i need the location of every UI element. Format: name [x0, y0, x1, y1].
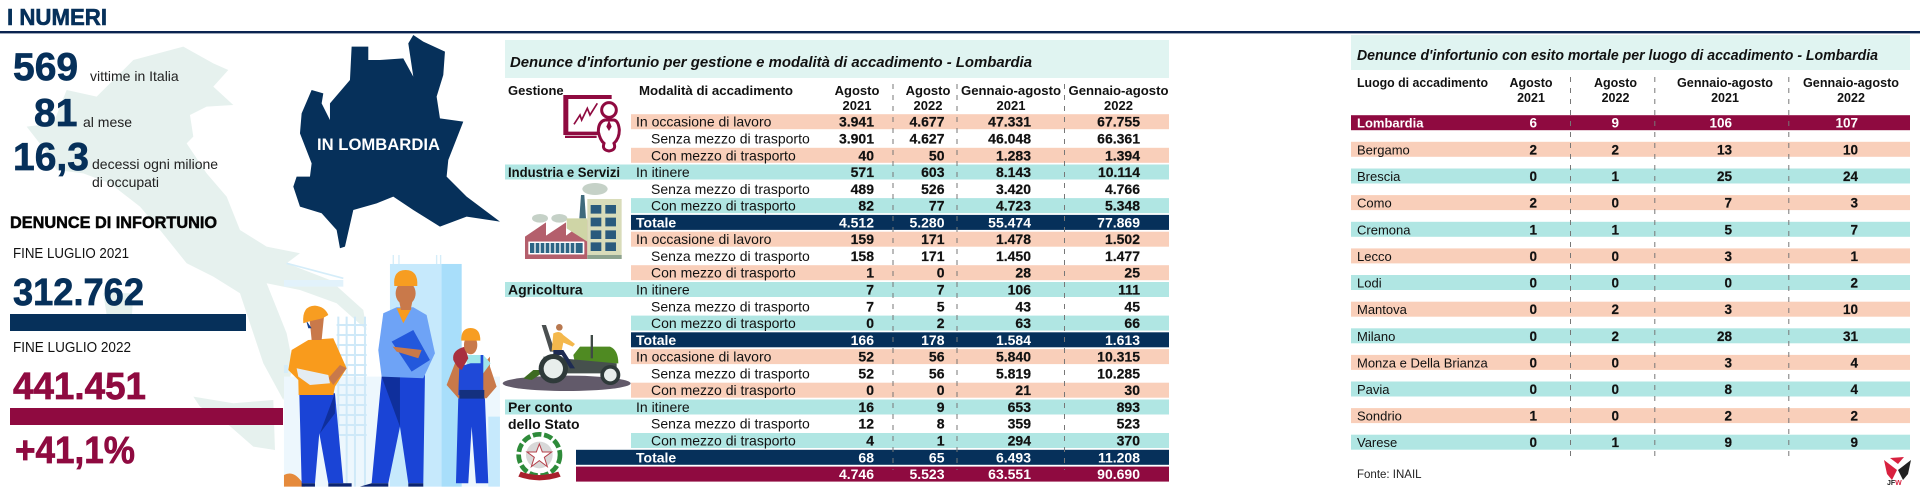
- row: in occasione di lavoro: [636, 231, 1140, 247]
- stat: fine luglio 2021: FINE LUGLIO 2021: [13, 246, 129, 262]
- row: senza mezzo: Senza mezzo di trasporto: [651, 298, 810, 314]
- row: totale industria: Totale: [636, 214, 676, 230]
- row: totale industria: 55.474: [988, 214, 1031, 230]
- icon: manager with chart: [563, 95, 619, 151]
- row: Brescia: 25: [1717, 169, 1732, 184]
- row: senza mezzo: 359: [1008, 416, 1031, 432]
- stat: 16,3 decessi: [13, 136, 218, 190]
- label: Per conto dello Stato: Per conto: [508, 399, 573, 415]
- row: Sondrio: 1: [1529, 409, 1537, 424]
- row: totale stato: Totale: [636, 449, 676, 465]
- row: con mezzo: Con mezzo di trasporto: [651, 432, 796, 448]
- row: Varese: Varese: [1357, 435, 1397, 450]
- icon: Italian Republic emblem: [518, 434, 561, 480]
- row: con mezzo: [651, 265, 1140, 281]
- row: grand total: 63.551: [988, 466, 1031, 482]
- row: con mezzo: 77: [929, 198, 945, 214]
- table header: Gennaio-agosto: [961, 83, 1061, 98]
- row: senza mezzo: 3.901: [839, 130, 874, 146]
- row: totale agricoltura: [636, 332, 1140, 348]
- table header: 2021: [843, 98, 871, 113]
- panel: table fatal accidents by place: [1351, 35, 1911, 487]
- source note: Fonte: INAIL: [1357, 469, 1422, 481]
- row: in occasione di lavoro: 52: [858, 349, 874, 365]
- table header: 2021: [997, 98, 1025, 113]
- row: Cremona: 7: [1850, 222, 1858, 237]
- row: con mezzo: 25: [1124, 265, 1140, 281]
- row: Sondrio: 0: [1611, 409, 1619, 424]
- panel: table by management: [503, 40, 1169, 482]
- row: Pavia: 4: [1850, 382, 1858, 397]
- table header: Agosto: [906, 83, 950, 98]
- row: senza mezzo: [651, 416, 1140, 432]
- row: senza mezzo: 5: [937, 298, 945, 314]
- row: con mezzo: 1: [866, 265, 874, 281]
- row: senza mezzo: 4.766: [1105, 181, 1140, 197]
- row: con mezzo: Con mezzo di trasporto: [651, 147, 796, 163]
- row: Monza e Della Brianza: 0: [1611, 355, 1619, 370]
- row: Varese: 1: [1611, 435, 1619, 450]
- stat: 569 vittime in Italia: vittime in Italia: [90, 68, 179, 84]
- worker: center: [360, 270, 435, 487]
- stat: 569 vittime in Italia: [13, 46, 179, 89]
- row: Varese: [1351, 435, 1910, 450]
- row: totale stato: 68: [858, 449, 874, 465]
- row: in occasione di lavoro: 1.478: [996, 231, 1031, 247]
- row: con mezzo: Con mezzo di trasporto: [651, 198, 796, 214]
- row: Brescia: Brescia: [1357, 169, 1401, 184]
- row: Milano: 28: [1717, 329, 1732, 344]
- label: Per conto dello Stato: dello Stato: [508, 416, 580, 432]
- row: Varese: 9: [1850, 435, 1858, 450]
- row: grand total: 5.523: [909, 466, 945, 482]
- row: Milano: 31: [1843, 329, 1858, 344]
- row: in itinere: [636, 399, 1140, 415]
- table title: Denunce d'infortunio per gestione e modalità di accadimento - Lombardia: [510, 55, 1032, 71]
- stat: 16,3 decessi: decessi ogni milione: [92, 156, 218, 172]
- row: Brescia: 0: [1529, 169, 1537, 184]
- row: con mezzo: 1.394: [1105, 147, 1140, 163]
- table title: Denunce d'infortunio con esito mortale per luogo di accadimento - Lombardia: [1357, 48, 1878, 64]
- row: totale industria: 77.869: [1097, 214, 1140, 230]
- row: in occasione di lavoro: In occasione di lavoro: [636, 231, 772, 247]
- row: totale agricoltura: 178: [921, 332, 945, 348]
- stat: 16,3 decessi: 16,3: [13, 136, 89, 179]
- worker: right: [447, 328, 497, 483]
- table header: 2022: [1837, 91, 1865, 105]
- table header: Modalità di accadimento: [639, 83, 793, 98]
- row: con mezzo: 40: [858, 147, 874, 163]
- row: Milano: [1351, 328, 1910, 344]
- map: Italy background: [27, 47, 367, 450]
- row: senza mezzo: 1.450: [996, 248, 1031, 264]
- row: in occasione di lavoro: 5.840: [996, 349, 1031, 365]
- row: con mezzo: 30: [1124, 382, 1140, 398]
- row: con mezzo: 66: [1124, 315, 1140, 331]
- row: totale industria: 4.512: [839, 214, 874, 230]
- row: Pavia: 8: [1724, 382, 1732, 397]
- row: con mezzo: Con mezzo di trasporto: [651, 265, 796, 281]
- row: Como: 3: [1850, 196, 1858, 211]
- row: in itinere: 16: [858, 399, 874, 415]
- row: Monza e Della Brianza: Monza e Della Brianza: [1357, 355, 1489, 370]
- table header: Agosto: [1509, 76, 1553, 90]
- row: Mantova: 10: [1843, 302, 1858, 317]
- row: in itinere: In itinere: [636, 399, 690, 415]
- row: senza mezzo: Senza mezzo di trasporto: [651, 181, 810, 197]
- row: Lombardia: 106: [1709, 116, 1732, 131]
- row: in occasione di lavoro: 3.941: [839, 114, 874, 130]
- row: in occasione di lavoro: [636, 114, 1140, 130]
- label: Agricoltura: Agricoltura: [508, 282, 583, 298]
- row: senza mezzo: 4.627: [909, 130, 945, 146]
- row: Sondrio: Sondrio: [1357, 409, 1402, 424]
- row: Bergamo: 2: [1611, 142, 1619, 157]
- row: Brescia: 24: [1843, 169, 1858, 184]
- row: in itinere: 8.143: [996, 164, 1031, 180]
- row: Mantova: Mantova: [1357, 302, 1408, 317]
- row: senza mezzo: 7: [866, 298, 874, 314]
- row: Varese: 9: [1724, 435, 1732, 450]
- row: totale industria: [636, 214, 1140, 230]
- row: con mezzo: 370: [1117, 432, 1140, 448]
- icon: publisher logo: JFW: [1887, 480, 1902, 487]
- row: con mezzo: 28: [1015, 265, 1031, 281]
- row: Lecco: 1: [1850, 249, 1858, 264]
- table header: [1357, 75, 1899, 105]
- row: in itinere: In itinere: [636, 164, 690, 180]
- row: Como: [1351, 195, 1910, 211]
- row: senza mezzo: 523: [1117, 416, 1140, 432]
- row: con mezzo: 50: [929, 147, 945, 163]
- row: senza mezzo: [651, 130, 1140, 146]
- row: Lodi: 0: [1611, 276, 1619, 290]
- row: con mezzo: 1: [937, 432, 945, 448]
- row: con mezzo: 5.348: [1105, 198, 1140, 214]
- row: Pavia: 0: [1529, 382, 1537, 397]
- stat: 81 al mese: [34, 92, 132, 135]
- label: Per conto dello Stato: [508, 399, 580, 432]
- title: I NUMERI: [7, 4, 107, 30]
- map: Lombardia: IN LOMBARDIA: [317, 135, 440, 154]
- icon: tractor: [503, 324, 631, 391]
- row: grand total: [839, 466, 1140, 482]
- row: senza mezzo: 3.420: [996, 181, 1031, 197]
- stat: fine luglio 2021: 312.762: [13, 272, 144, 314]
- row: Lodi: 0: [1529, 276, 1537, 290]
- row: totale stato: 11.208: [1098, 449, 1140, 465]
- row: senza mezzo: [651, 181, 1140, 197]
- row: Mantova: 0: [1529, 302, 1537, 317]
- row: in itinere: 571: [851, 164, 874, 180]
- row: con mezzo: [651, 432, 1140, 448]
- stat: fine luglio 2022: 441.451: [13, 366, 146, 408]
- row: Milano: 2: [1611, 329, 1619, 344]
- row: senza mezzo: 56: [929, 365, 945, 381]
- row: Lombardia: 6: [1529, 116, 1537, 131]
- row: Como: Como: [1357, 196, 1392, 211]
- row: in itinere: 653: [1008, 399, 1031, 415]
- row: in itinere: 106: [1008, 282, 1031, 298]
- row: grand total: 4.746: [839, 466, 874, 482]
- row: in itinere: 893: [1117, 399, 1140, 415]
- row: Bergamo: 2: [1529, 142, 1537, 157]
- row: Lodi: [1351, 275, 1910, 290]
- icon: factory: [525, 183, 622, 259]
- row: in occasione di lavoro: 67.755: [1097, 114, 1140, 130]
- table title: [505, 40, 1169, 78]
- stat: 81 al mese: 81: [34, 92, 77, 135]
- row: in itinere: 111: [1118, 282, 1140, 298]
- row: in occasione di lavoro: 10.315: [1097, 349, 1140, 365]
- row: Monza e Della Brianza: 4: [1850, 355, 1858, 370]
- row: Como: 2: [1529, 196, 1537, 211]
- row: grand total: 90.690: [1097, 466, 1140, 482]
- row: con mezzo: 82: [858, 198, 874, 214]
- row: Mantova: [1351, 302, 1910, 317]
- row: Milano: 0: [1529, 329, 1537, 344]
- row: Pavia: Pavia: [1357, 382, 1390, 397]
- row: senza mezzo: 171: [921, 248, 945, 264]
- row: Lombardia: [1351, 115, 1910, 131]
- row: in occasione di lavoro: In occasione di lavoro: [636, 349, 772, 365]
- row: totale agricoltura: 166: [851, 332, 874, 348]
- stat: fine luglio 2022: FINE LUGLIO 2022: [13, 340, 131, 356]
- row: Mantova: 2: [1611, 302, 1619, 317]
- row: senza mezzo: Senza mezzo di trasporto: [651, 416, 810, 432]
- row: in itinere: [636, 164, 1140, 180]
- row: con mezzo: 294: [1008, 432, 1031, 448]
- row: Cremona: Cremona: [1357, 222, 1411, 237]
- row: senza mezzo: 1.477: [1105, 248, 1140, 264]
- icon: publisher logo: [1884, 457, 1911, 487]
- row: Cremona: [1351, 222, 1910, 237]
- row: Monza e Della Brianza: 3: [1724, 355, 1732, 370]
- row: in occasione di lavoro: In occasione di lavoro: [636, 114, 772, 130]
- row: Varese: 0: [1529, 435, 1537, 450]
- row: Como: 0: [1611, 196, 1619, 211]
- row: con mezzo: 0: [937, 382, 945, 398]
- row: totale agricoltura: 1.584: [996, 332, 1031, 348]
- row: Cremona: 5: [1724, 222, 1732, 237]
- row: Pavia: 0: [1611, 382, 1619, 397]
- table header: 2022: [1602, 91, 1629, 105]
- table header: 2022: [914, 98, 942, 113]
- stat: fine luglio 2021: [10, 246, 246, 331]
- row: Sondrio: [1351, 408, 1910, 424]
- row: senza mezzo: 45: [1124, 298, 1140, 314]
- stat: 16,3 decessi: di occupati: [92, 174, 159, 190]
- row: in itinere: 10.114: [1098, 164, 1140, 180]
- row: con mezzo: 0: [866, 315, 874, 331]
- row: Bergamo: [1351, 142, 1910, 157]
- table header: Gestione: [508, 83, 564, 98]
- row: con mezzo: [651, 147, 1140, 163]
- row: senza mezzo: Senza mezzo di trasporto: [651, 365, 810, 381]
- row: senza mezzo: [651, 365, 1140, 381]
- row: Bergamo: Bergamo: [1357, 142, 1410, 157]
- row: Lodi: 2: [1850, 276, 1858, 290]
- row: Cremona: 1: [1611, 222, 1619, 237]
- row: in occasione di lavoro: 56: [929, 349, 945, 365]
- row: totale agricoltura: Totale: [636, 332, 676, 348]
- row: con mezzo: Con mezzo di trasporto: [651, 315, 796, 331]
- row: Lombardia: Lombardia: [1357, 116, 1424, 131]
- table title: [1351, 35, 1910, 70]
- row: senza mezzo: 12: [858, 416, 874, 432]
- row: senza mezzo: [651, 248, 1140, 264]
- row: Pavia: [1351, 382, 1910, 397]
- row: Lecco: 0: [1611, 249, 1619, 264]
- row: senza mezzo: 8: [937, 416, 945, 432]
- stat: variation percent: +41,1%: [15, 430, 135, 472]
- worker: left: [288, 306, 352, 487]
- row: senza mezzo: 10.285: [1097, 365, 1140, 381]
- row: in itinere: 603: [921, 164, 945, 180]
- heading: denunce di infortunio: DENUNCE DI INFORTUNIO: [10, 213, 217, 232]
- row: Mantova: 3: [1724, 302, 1732, 317]
- row: con mezzo: [651, 315, 1140, 331]
- row: totale industria: 5.280: [909, 214, 945, 230]
- row: senza mezzo: 158: [851, 248, 874, 264]
- table header: [508, 83, 1169, 113]
- row: senza mezzo: 66.361: [1097, 130, 1140, 146]
- table header: Luogo di accadimento: [1357, 75, 1488, 90]
- row: Milano: Milano: [1357, 329, 1395, 344]
- row: totale stato: 65: [929, 449, 945, 465]
- row: Lombardia: 107: [1835, 116, 1858, 131]
- row: con mezzo: 2: [937, 315, 945, 331]
- table header: Gennaio-agosto: [1803, 76, 1899, 90]
- row: con mezzo: 0: [937, 265, 945, 281]
- table header: Agosto: [1594, 76, 1637, 90]
- row: senza mezzo: Senza mezzo di trasporto: [651, 130, 810, 146]
- row: con mezzo: [651, 198, 1140, 214]
- label: Industria e Servizi: Industria e Servizi: [508, 164, 620, 180]
- table header: 2022: [1104, 98, 1133, 113]
- row: in occasione di lavoro: 4.677: [909, 114, 945, 130]
- row: con mezzo: 21: [1015, 382, 1031, 398]
- row: in occasione di lavoro: 171: [921, 231, 945, 247]
- row: Lodi: 0: [1724, 276, 1732, 290]
- row: con mezzo: 63: [1015, 315, 1031, 331]
- row: in occasione di lavoro: 47.331: [988, 114, 1031, 130]
- stat: 81 al mese: al mese: [83, 114, 132, 130]
- row: senza mezzo: 43: [1015, 298, 1031, 314]
- row: con mezzo: Con mezzo di trasporto: [651, 382, 796, 398]
- table header: 2021: [1517, 91, 1545, 105]
- row: Brescia: [1351, 168, 1910, 184]
- row: Lecco: Lecco: [1357, 249, 1392, 264]
- row: in itinere: 9: [937, 399, 945, 415]
- table header: Gennaio-agosto: [1677, 76, 1773, 90]
- row bands: [505, 114, 1169, 482]
- row: in occasione di lavoro: 159: [851, 231, 874, 247]
- table header: Gennaio-agosto: [1068, 83, 1169, 98]
- row: Lecco: 0: [1529, 249, 1537, 264]
- row: senza mezzo: [651, 298, 1140, 314]
- row: Sondrio: 2: [1850, 409, 1858, 424]
- row: in itinere: [636, 282, 1140, 298]
- table header: Agosto: [835, 83, 879, 98]
- stat: 569 vittime in Italia: 569: [13, 46, 78, 89]
- row: in occasione di lavoro: 1.502: [1105, 231, 1140, 247]
- row: Bergamo: 13: [1717, 142, 1732, 157]
- row: con mezzo: 4.723: [996, 198, 1031, 214]
- map: Lombardia: [293, 35, 500, 248]
- row: Cremona: 1: [1529, 222, 1537, 237]
- row: Lombardia: 9: [1611, 116, 1619, 131]
- row: Lodi: Lodi: [1357, 276, 1382, 290]
- row: in itinere: 7: [866, 282, 874, 298]
- row: con mezzo: 0: [866, 382, 874, 398]
- row: senza mezzo: 5.819: [996, 365, 1031, 381]
- row: Brescia: 1: [1611, 169, 1619, 184]
- row: Lecco: 3: [1724, 249, 1732, 264]
- row: senza mezzo: 52: [858, 365, 874, 381]
- stat: fine luglio 2022: [10, 340, 283, 425]
- row: con mezzo: 4: [866, 432, 874, 448]
- row: totale stato: 6.493: [996, 449, 1031, 465]
- row: in itinere: In itinere: [636, 282, 690, 298]
- row: Como: 7: [1724, 196, 1732, 211]
- row: senza mezzo: 489: [851, 181, 874, 197]
- row: senza mezzo: 46.048: [988, 130, 1031, 146]
- illustration: construction workers: [284, 255, 500, 487]
- row: senza mezzo: 526: [921, 181, 945, 197]
- row: Monza e Della Brianza: 0: [1529, 355, 1537, 370]
- row: in occasione di lavoro: [636, 349, 1140, 365]
- row: in itinere: 7: [937, 282, 945, 298]
- row: Monza e Della Brianza: [1351, 355, 1910, 370]
- row: senza mezzo: Senza mezzo di trasporto: [651, 248, 810, 264]
- row: Sondrio: 2: [1724, 409, 1732, 424]
- row: totale stato: [636, 449, 1140, 465]
- row: con mezzo: 1.283: [996, 147, 1031, 163]
- row: con mezzo: [651, 382, 1140, 398]
- row: Bergamo: 10: [1843, 142, 1858, 157]
- table header: 2021: [1711, 91, 1739, 105]
- row: Lecco: [1351, 248, 1910, 264]
- row: totale agricoltura: 1.613: [1105, 332, 1140, 348]
